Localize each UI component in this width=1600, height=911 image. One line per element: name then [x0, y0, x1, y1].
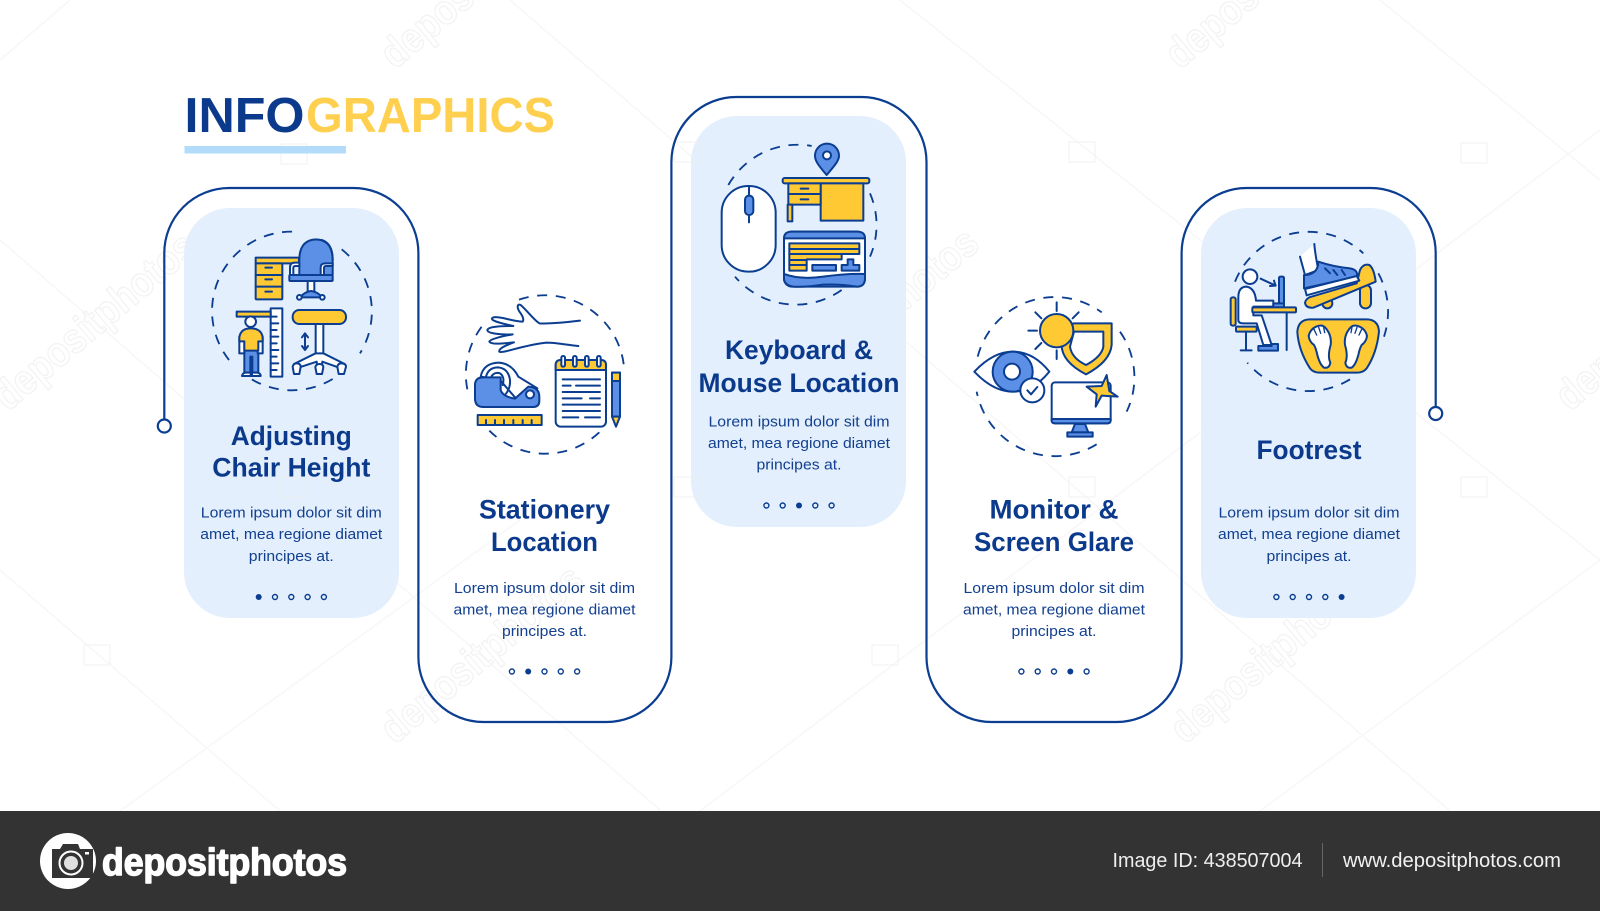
heading: Adjusting — [231, 421, 352, 451]
body text — [963, 580, 1146, 640]
body text — [708, 414, 891, 474]
pagination dots — [1274, 594, 1345, 600]
body text — [454, 580, 636, 640]
title: INFO — [184, 89, 304, 143]
serpentine outline connecting all steps — [158, 97, 1442, 722]
panel: keyboard and mouse location — [698, 144, 900, 508]
text: depositphotos — [371, 555, 592, 752]
heading — [974, 494, 1134, 557]
title: GRAPHICS — [306, 89, 555, 143]
logo wordmark: depositphotos — [102, 842, 347, 884]
pagination dots — [509, 668, 580, 674]
heading: Screen Glare — [974, 527, 1134, 557]
website: www.depositphotos.com — [1342, 850, 1561, 872]
text: depositphotos — [1161, 555, 1382, 752]
footer bar — [0, 811, 1600, 911]
text: depositphotos — [766, 218, 987, 415]
heading: Stationery — [479, 494, 610, 524]
body text: principes at. — [756, 456, 842, 474]
panel: adjusting chair height — [200, 232, 383, 600]
icon: camera logo — [40, 833, 96, 889]
heading: Chair Height — [212, 452, 370, 482]
body text: Lorem ipsum dolor sit dim — [454, 580, 635, 597]
body text: amet, mea regione diamet — [200, 526, 383, 543]
body text: Lorem ipsum dolor sit dim — [1218, 504, 1400, 522]
body text: principes at. — [1266, 548, 1352, 565]
body text: principes at. — [1012, 623, 1096, 640]
body text: amet, mea regione diamet — [454, 602, 636, 618]
body text — [200, 504, 383, 565]
body text: Lorem ipsum dolor sit dim — [964, 580, 1144, 597]
icon: sun, shield, eye, monitor with glare — [974, 297, 1134, 456]
body text: Lorem ipsum dolor sit dim — [201, 504, 382, 522]
body text: principes at. — [249, 548, 334, 565]
icon: chair, desk, height ruler, stool — [212, 232, 372, 390]
body text — [1218, 504, 1401, 565]
panel: footrest — [1218, 232, 1401, 600]
icon: hand, tape dispenser, notepad, pencil — [466, 295, 624, 454]
body text: amet, mea regione diamet — [708, 435, 891, 452]
body text: Lorem ipsum dolor sit dim — [708, 414, 890, 430]
heading — [698, 335, 900, 398]
body text: amet, mea regione diamet — [963, 602, 1146, 618]
panel: monitor and screen glare — [963, 297, 1146, 674]
heading: Location — [491, 527, 598, 557]
image id: Image ID: 438507004 — [1112, 850, 1302, 872]
heading — [479, 494, 610, 557]
body text: amet, mea regione diamet — [1218, 526, 1401, 543]
heading: Monitor & — [990, 494, 1118, 524]
heading — [212, 421, 370, 482]
icon: seated person, shoe on footrest, foot mat — [1231, 232, 1388, 391]
heading: Footrest — [1256, 435, 1362, 465]
title — [184, 89, 555, 154]
pagination dots — [764, 502, 834, 508]
panel: stationery location — [454, 295, 636, 674]
pagination dots — [256, 594, 326, 600]
pagination dots — [1019, 668, 1089, 674]
icon: mouse, desk, map pin, keyboard — [722, 144, 877, 305]
heading: Keyboard & — [725, 335, 873, 365]
body text: principes at. — [502, 623, 587, 640]
heading: Mouse Location — [698, 368, 900, 398]
panel: light background cards — [184, 116, 1416, 618]
